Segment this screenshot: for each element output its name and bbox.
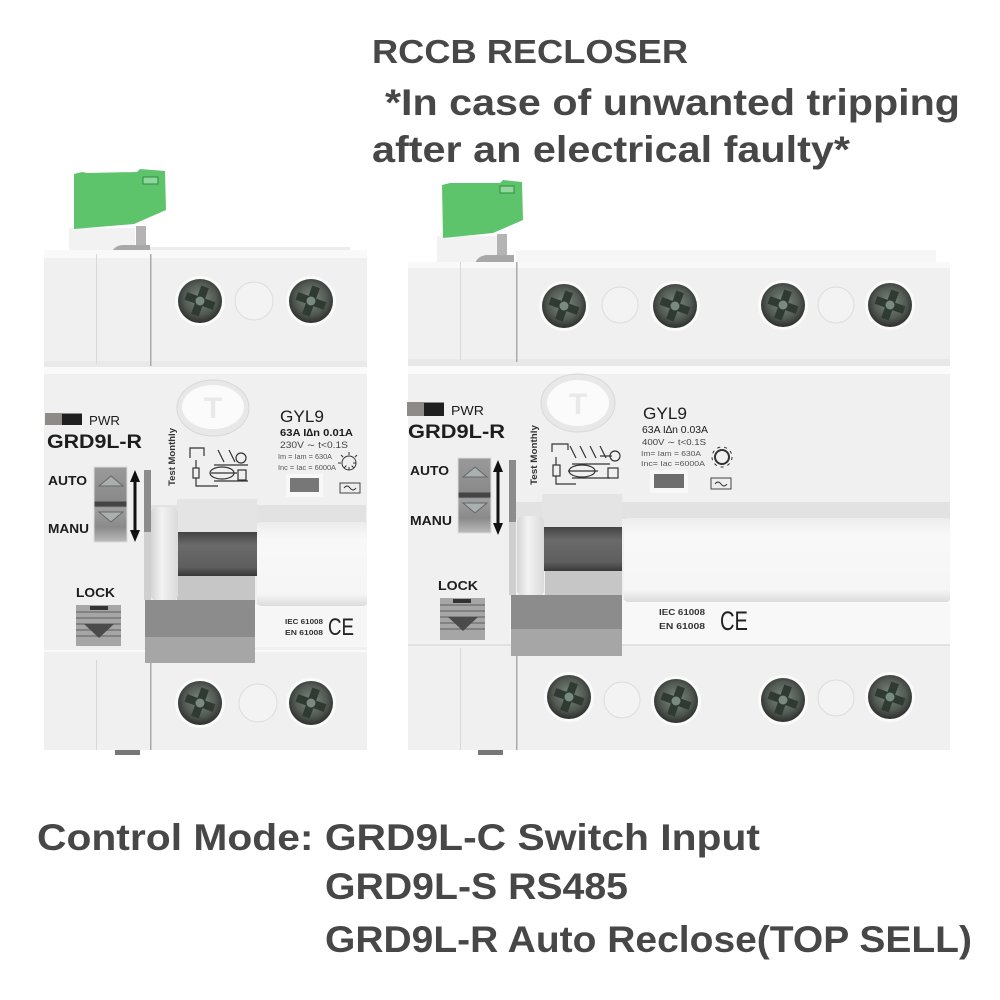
icon: mode slider [94,467,127,542]
title: after an electrical faulty* [372,129,851,170]
certification text: IEC 61008 [659,607,705,617]
title: *In case of unwanted tripping [385,82,960,123]
icon: test button [177,380,249,436]
certification text: EN 61008 [659,621,705,631]
icon: temperature mark [712,447,732,467]
rating text: Im= Iam = 630A [641,449,701,458]
certification text: CE [720,606,748,636]
icon: test button [541,374,615,432]
rating text: 63A I∆n 0.03A [642,424,708,436]
icon: screws [175,276,336,728]
right breaker body [408,250,950,755]
wiring diagram [190,448,248,486]
arrow: slider direction [493,460,503,535]
model label: GRD9L-R [408,422,505,443]
control mode text: GRD9L-S RS485 [325,866,628,907]
lock label: LOCK [438,579,478,593]
icon: temperature mark [338,452,360,474]
icon: lock button [440,598,485,640]
rating text: 400V ∼ t<0.1S [642,437,706,447]
rating text: 230V ∼ t<0.1S [280,440,348,450]
lock label: LOCK [76,586,115,600]
test monthly label: Test Monthly [529,424,540,485]
model label: GRD9L-R [47,432,142,453]
rating text: 63A I∆n 0.01A [280,427,353,439]
control mode text: GRD9L-R Auto Reclose(TOP SELL) [325,919,972,960]
test monthly label: Test Monthly [167,427,178,486]
power label [45,413,120,428]
left breaker body [44,247,367,755]
control mode text: Control Mode: GRD9L-C Switch Input [37,817,760,858]
rating text: GYL9 [643,405,687,423]
rating text: Inc= Iac =6000A [641,459,705,468]
control mode text [37,817,972,960]
certification text [285,614,354,641]
wiring diagram [552,444,620,484]
icon: screws [539,280,915,726]
icon: test button: T [569,388,587,421]
icon: window [286,474,323,497]
roller handle [509,460,950,656]
icon: test button: T [204,392,222,425]
certification text [659,606,748,636]
certification text: EN 61008 [285,628,323,637]
icon: mode slider [458,458,491,533]
roller handle [144,470,367,663]
certification text: CE [328,614,354,641]
icon: lock button [76,605,121,646]
panel: right 4-pole breaker [407,180,950,755]
rating text [641,405,708,468]
manual label: MANU [410,514,452,528]
auto label: AUTO [410,464,449,478]
arrow: slider direction [130,470,140,542]
rating text: Inc = Iac = 6000A [278,465,336,472]
title: RCCB RECLOSER [372,33,688,70]
icon: left green connector [69,169,166,256]
certification text: IEC 61008 [285,617,323,626]
power label: PWR [89,414,120,428]
icon: AC wave box [711,478,731,489]
power label: PWR [451,403,484,418]
icon: right green connector [437,180,523,266]
rating text: GYL9 [280,408,324,426]
rating text [278,408,353,472]
manual label: MANU [48,522,89,536]
power label [407,402,484,418]
panel: left 2-pole breaker [44,169,367,755]
auto label: AUTO [48,474,87,488]
rating text: Im = Iam = 630A [278,454,332,461]
icon: window [650,470,688,493]
icon: AC wave box [340,483,360,493]
title [372,33,960,170]
